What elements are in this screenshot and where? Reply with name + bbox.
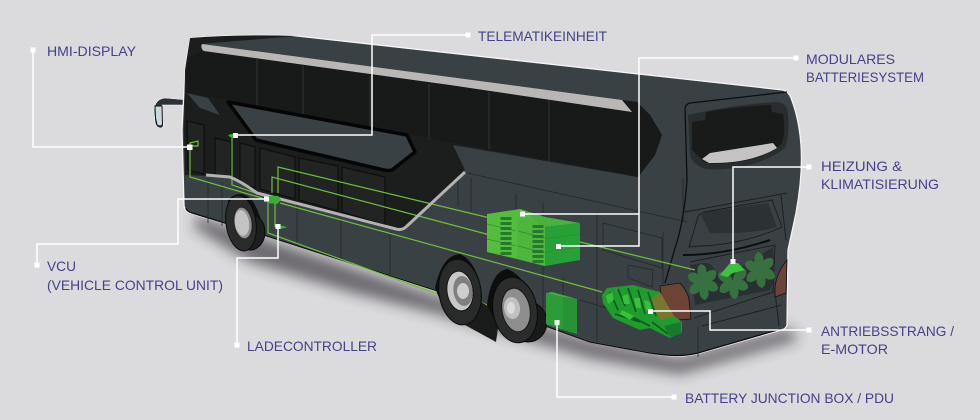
- fan recess panel: [690, 247, 775, 305]
- label: Modulares Batteriesystem: [806, 51, 924, 85]
- front wheel: [222, 193, 265, 253]
- lower silver strip: [206, 172, 465, 230]
- leader: Modulares Batteriesystem: [523, 58, 796, 246]
- roof silver strip: [201, 44, 632, 112]
- component: heating unit: [720, 263, 745, 277]
- component: fans: [686, 252, 777, 300]
- label: Antriebsstrang / E-Motor: [821, 323, 954, 357]
- label: HMI-Display: HMI-DISPLAY: [47, 43, 137, 59]
- label: Telematikeinheit: TELEMATIKEINHEIT: [478, 28, 607, 44]
- label: Modulares Batteriesystem: MODULARES: [806, 51, 895, 67]
- component: Telematikeinheit: [228, 133, 236, 138]
- label: VCU: [47, 258, 223, 293]
- bus illustration: [154, 35, 801, 357]
- middle wheel: [435, 254, 500, 342]
- leader: VCU: [37, 199, 266, 265]
- leader: Telematikeinheit: [235, 35, 468, 135]
- upper window dividers: [257, 58, 549, 161]
- component: VCU: [268, 196, 281, 204]
- label: VCU: (VEHICLE CONTROL UNIT): [47, 277, 223, 293]
- leader: Antriebsstrang: [650, 311, 809, 330]
- component: e-motor: [602, 285, 682, 338]
- lower deck windows: [187, 121, 385, 225]
- leader: HMI-Display: [33, 50, 190, 147]
- upper deck windows: [187, 51, 662, 177]
- dark cab and window band: [184, 35, 662, 230]
- wiring harness: [190, 137, 695, 325]
- rear lower panels: [685, 193, 787, 326]
- bus body: [182, 35, 801, 356]
- rear window: [688, 102, 789, 170]
- component: Ladecontroller: [279, 225, 287, 229]
- rear wheel: [487, 269, 547, 346]
- side window panel: [228, 102, 415, 170]
- label: Antriebsstrang / E-Motor: ANTRIEBSSTRANG /: [821, 323, 954, 339]
- component: battery junction box: [546, 292, 577, 334]
- fan middle: [716, 267, 750, 299]
- rear window silver strip: [702, 143, 777, 163]
- leader lines: [33, 35, 809, 397]
- fan right: [743, 252, 777, 288]
- component: battery system: [487, 209, 580, 266]
- label: Battery Junction Box / PDU: BATTERY JUNCTION BOX / PDU: [685, 390, 894, 406]
- leader: Ladecontroller: [237, 226, 278, 345]
- rear panel outline: [665, 92, 787, 283]
- label: Heizung und Klimatisierung: KLIMATISIERUNG: [821, 176, 939, 192]
- label: Heizung und Klimatisierung: HEIZUNG &: [821, 158, 903, 174]
- rear black bar: [683, 240, 770, 255]
- label: Modulares Batteriesystem: BATTERIESYSTEM: [806, 69, 924, 85]
- icon: mirror: [154, 98, 188, 128]
- tail light right: [775, 260, 787, 297]
- leader: Heizung: [733, 167, 809, 261]
- leader: Battery Junction Box: [557, 322, 674, 397]
- label: VCU: VCU: [47, 258, 76, 274]
- label: Heizung und Klimatisierung: [821, 158, 939, 192]
- ground shadow: [195, 215, 798, 374]
- rear recess: [700, 203, 777, 233]
- body lower edge: [186, 208, 781, 356]
- label: Antriebsstrang / E-Motor: E-MOTOR: [821, 341, 888, 357]
- leader end markers: [30, 32, 812, 400]
- tail light left: [660, 283, 691, 320]
- lower body panel lines: [208, 172, 698, 357]
- hatch by mirror: [187, 93, 220, 115]
- fan left: [686, 264, 720, 300]
- label: Ladecontroller: LADECONTROLLER: [247, 338, 377, 354]
